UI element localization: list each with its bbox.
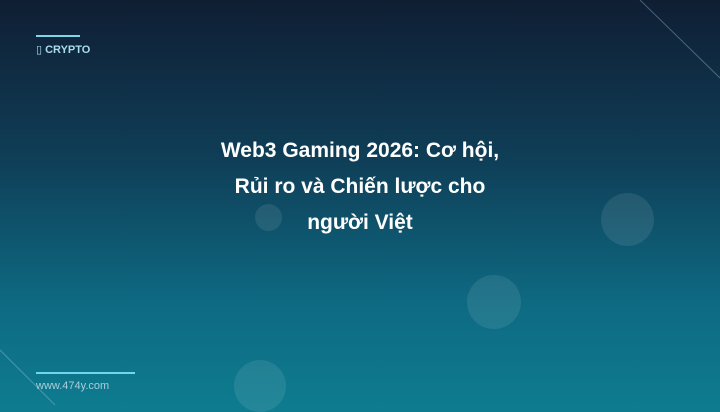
title: Rủi ro và Chiến lược cho [235, 175, 485, 198]
circle right [601, 193, 654, 246]
title [220, 139, 499, 234]
accent line top [36, 35, 80, 37]
title: Web3 Gaming 2026: Cơ hội, [221, 139, 499, 162]
circle middle [467, 275, 521, 329]
circle bottom [234, 360, 286, 412]
title: người Việt [307, 211, 413, 234]
category label: ▯ CRYPTO [36, 44, 90, 56]
accent line bottom [36, 372, 135, 374]
circle small [255, 204, 282, 231]
website: www.474y.com [36, 380, 109, 392]
